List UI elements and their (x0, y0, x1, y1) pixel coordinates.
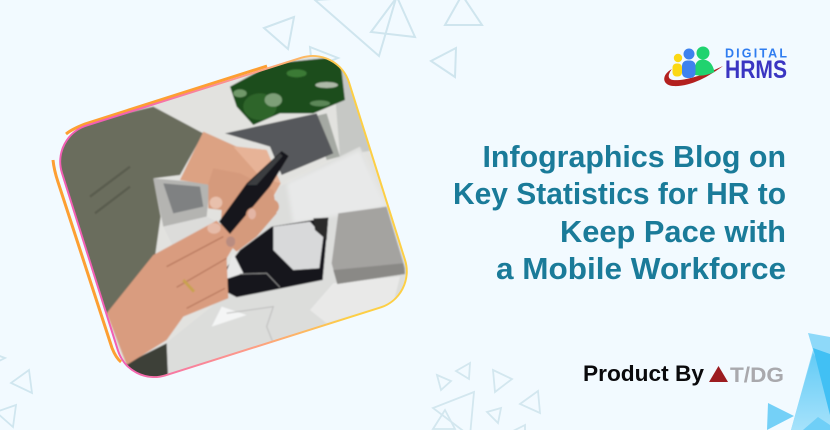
logo: Digital HRMS: HRMS (725, 56, 787, 84)
marble table (344, 147, 362, 156)
upper hand (207, 180, 278, 252)
logo wordmark: DIGITAL (725, 46, 787, 60)
bottom dark shirt (126, 342, 169, 376)
shirt (53, 107, 203, 315)
title: a Mobile Workforce (496, 251, 786, 286)
logo swoosh (664, 66, 723, 86)
decorative triangles bottom left (0, 355, 32, 427)
title: Key Statistics for HR to (453, 176, 786, 211)
back wall and furniture (152, 70, 370, 228)
title: Infographics Blog on (482, 139, 786, 174)
logo people (672, 46, 714, 78)
phone (219, 151, 289, 234)
title: Keep Pace with (560, 214, 786, 249)
black marble tile (226, 218, 328, 298)
photo frame gradient outline (51, 46, 416, 387)
photo frame orange accent (53, 66, 267, 362)
AT/DG logo: T/DG (730, 364, 784, 387)
stone block (331, 206, 406, 272)
forearm (180, 132, 281, 197)
decorative triangles bottom centre (433, 363, 540, 430)
photo: hands holding a phone (61, 57, 406, 376)
decorative triangles top (264, 0, 482, 77)
logo: Digital HRMS (664, 46, 787, 86)
title (453, 139, 786, 286)
AT/DG logo (709, 364, 784, 387)
decorative blue shapes bottom right (767, 333, 830, 430)
product by label: Product By (583, 361, 705, 386)
plant (230, 57, 345, 125)
lower hand (107, 221, 237, 365)
